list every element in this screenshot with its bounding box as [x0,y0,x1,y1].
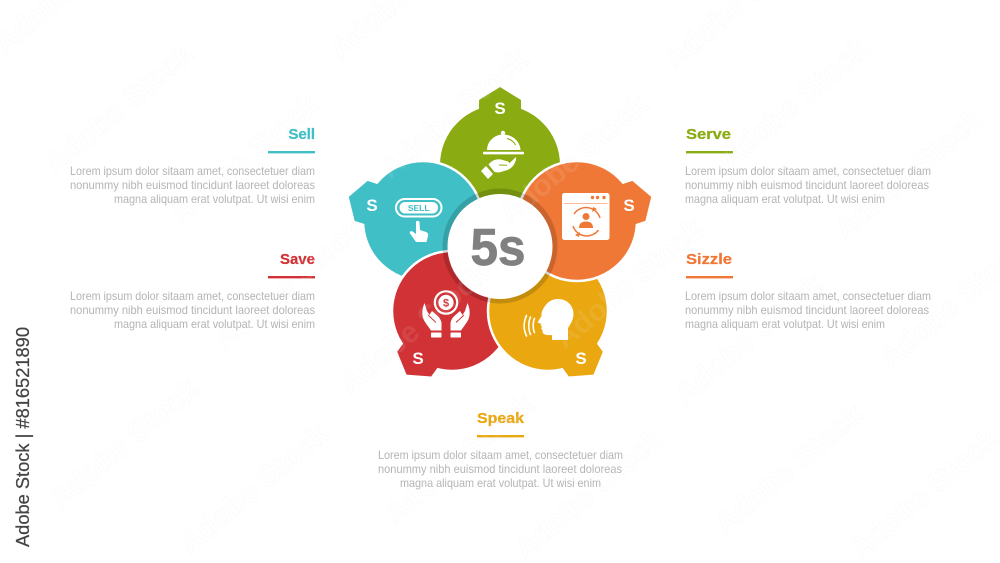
text block: Save: magna aliquam erat volutpat. Ut wisi enim [114,317,315,331]
panel: Sizzle [685,251,931,331]
watermark pattern: Adobe Stock [38,37,200,180]
panel: Sell [70,126,315,206]
heading: Sizzle: Sizzle [686,251,732,268]
text block: Speak: nonummy nibh euismod tincidunt laoreet doloreas [378,462,622,476]
watermark pattern: Adobe Stock [668,267,830,410]
watermark pattern: Adobe Stock [378,387,540,530]
center circle [448,194,552,299]
watermark pattern: Adobe Stock [713,32,875,175]
text block: Speak [378,448,623,490]
heading: Speak: Speak [477,410,525,427]
petal: Sell (teal) [342,161,483,281]
watermark pattern: Adobe Stock [708,397,870,540]
icon: sell button with pointer: SELL [408,203,430,213]
tab letter: Speak: S [575,349,587,368]
center shadow ring [442,188,558,304]
text block: Speak: magna aliquam erat volutpat. Ut wisi enim [400,476,601,490]
text block: Save: Lorem ipsum dolor sitaam amet, consectetuer diam [70,289,315,303]
center label: 5s: 5s [470,219,526,277]
watermark pattern: Adobe Stock [173,417,335,560]
text block: Save [70,289,315,331]
icon: browser window with user [562,193,610,240]
icon: cloche on hand [481,131,524,179]
icon: coin over two hands [422,291,470,338]
text block: Sell: magna aliquam erat volutpat. Ut wisi enim [114,192,315,206]
underline: Speak [477,435,524,437]
panel: Save [70,251,315,331]
heading: Save: Save [280,251,315,268]
heading: Serve: Serve [686,126,731,143]
tab letter: Serve: S [494,99,506,118]
watermark pattern: Adobe Stock [163,87,325,230]
tab letter: Sizzle: S [623,196,635,215]
icon: coin over two hands: $ [443,298,449,310]
heading: Sell: Sell [288,126,315,143]
panel: Serve [685,126,931,206]
text block: Sell: Lorem ipsum dolor sitaam amet, consectetuer diam [70,164,315,178]
text block: Save: nonummy nibh euismod tincidunt laoreet doloreas [70,303,315,317]
panel: Speak [378,410,623,490]
watermark pattern: Adobe Stock [828,102,990,245]
petal: Save (red) [390,251,512,387]
text block: Speak: Lorem ipsum dolor sitaam amet, consectetuer diam [378,448,623,462]
tab letter: Save: S [412,349,424,368]
petal: Serve (green) [440,87,560,225]
icon: sell button with pointer [396,199,442,242]
watermark pattern: Adobe Stock [508,422,670,563]
text block: Sizzle [685,289,931,331]
text block: Sell: nonummy nibh euismod tincidunt laoreet doloreas [70,178,315,192]
tab letter: Sell: S [366,196,378,215]
petal: Sizzle (orange) [517,161,658,281]
text block: Serve: nonummy nibh euismod tincidunt laoreet doloreas [685,178,929,192]
petal: Speak (yellow) [488,251,610,387]
text block: Sizzle: nonummy nibh euismod tincidunt laoreet doloreas [685,303,929,317]
watermark pattern: Adobe Stock [548,212,710,355]
icon: speaking head [524,299,574,340]
text block: Serve: Lorem ipsum dolor sitaam amet, consectetuer diam [685,164,931,178]
text block: Sizzle: magna aliquam erat volutpat. Ut wisi enim [685,317,885,331]
watermark pattern: Adobe Stock [43,372,205,515]
watermark pattern: Adobe Stock [493,87,655,230]
underline: Sizzle [686,276,733,278]
underline: Serve [686,151,733,153]
watermark pattern: Adobe Stock [373,42,535,185]
watermark pattern: Adobe Stock [208,212,370,355]
text block: Sizzle: Lorem ipsum dolor sitaam amet, consectetuer diam [685,289,931,303]
watermark pattern: Adobe Stock [333,257,495,400]
text block: Sell [70,164,315,206]
text block: Serve [685,164,931,206]
flower diagram [342,87,658,387]
watermark: stock id: Adobe Stock | #816521890 [13,327,33,547]
underline: Save [268,276,315,278]
text block: Serve: magna aliquam erat volutpat. Ut wisi enim [685,192,885,206]
underline: Sell [268,151,315,153]
